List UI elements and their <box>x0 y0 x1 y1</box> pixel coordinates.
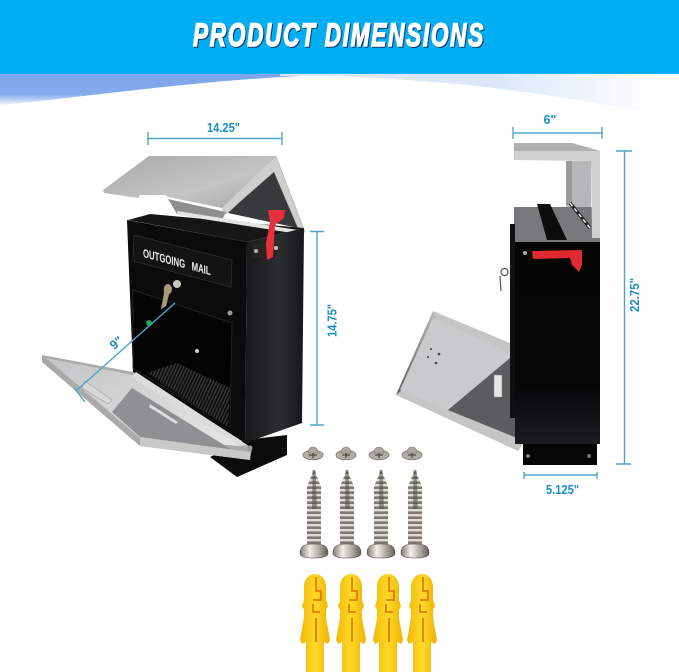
title: PRODUCT DIMENSIONS <box>193 17 485 53</box>
background swoosh <box>0 74 679 118</box>
roof inner posts <box>566 161 591 207</box>
box top surface <box>514 207 600 242</box>
dimension: 14.75 height <box>310 232 340 425</box>
washers <box>303 447 422 460</box>
dimension: 5.125 width: 5.125" <box>546 483 579 497</box>
mailbox side view <box>396 143 600 465</box>
roof inner and right slope <box>221 156 305 233</box>
lock and key <box>161 280 181 309</box>
dimension: 5.125 width <box>524 472 597 497</box>
dimension: 22.75 height <box>616 151 642 464</box>
wall anchors <box>300 574 437 672</box>
dimension: 6 width: 6" <box>544 113 557 127</box>
chain <box>570 203 590 228</box>
flag mount <box>253 244 278 258</box>
green dot <box>146 320 152 326</box>
door side <box>396 311 527 451</box>
red flag <box>266 210 285 260</box>
outgoing mail label: OUTGOING MAIL <box>143 246 211 278</box>
mounting bracket <box>210 435 287 477</box>
cavity hole <box>195 349 199 353</box>
box front <box>127 220 247 443</box>
mesh floor <box>147 363 230 427</box>
red flag <box>532 250 582 272</box>
screws <box>300 469 429 558</box>
dimension: 9 depth: 9" <box>107 333 126 352</box>
box body <box>515 242 600 444</box>
screw on front <box>228 310 232 316</box>
roof top panel <box>103 156 276 208</box>
rail behind slot <box>177 211 298 234</box>
keys <box>500 269 508 291</box>
dimension: 6 width <box>513 113 602 139</box>
box right side <box>245 228 304 443</box>
dimension: 22.75 height: 22.75" <box>628 278 642 312</box>
mailbox front view <box>42 156 305 477</box>
open door <box>42 355 252 460</box>
sign plate <box>133 235 232 287</box>
roof <box>514 143 600 238</box>
dimension: 14.25 width: 14.25" <box>207 121 240 135</box>
dimension: 14.75 height: 14.75" <box>326 304 340 337</box>
dimension: 14.25 width <box>148 121 282 145</box>
mail cavity <box>133 290 232 427</box>
side door rivets <box>427 348 440 364</box>
hinge strip <box>168 199 226 220</box>
header band <box>0 0 679 74</box>
box top surface <box>128 214 304 242</box>
dimension: 9 depth <box>74 303 175 402</box>
bracket <box>523 444 597 465</box>
